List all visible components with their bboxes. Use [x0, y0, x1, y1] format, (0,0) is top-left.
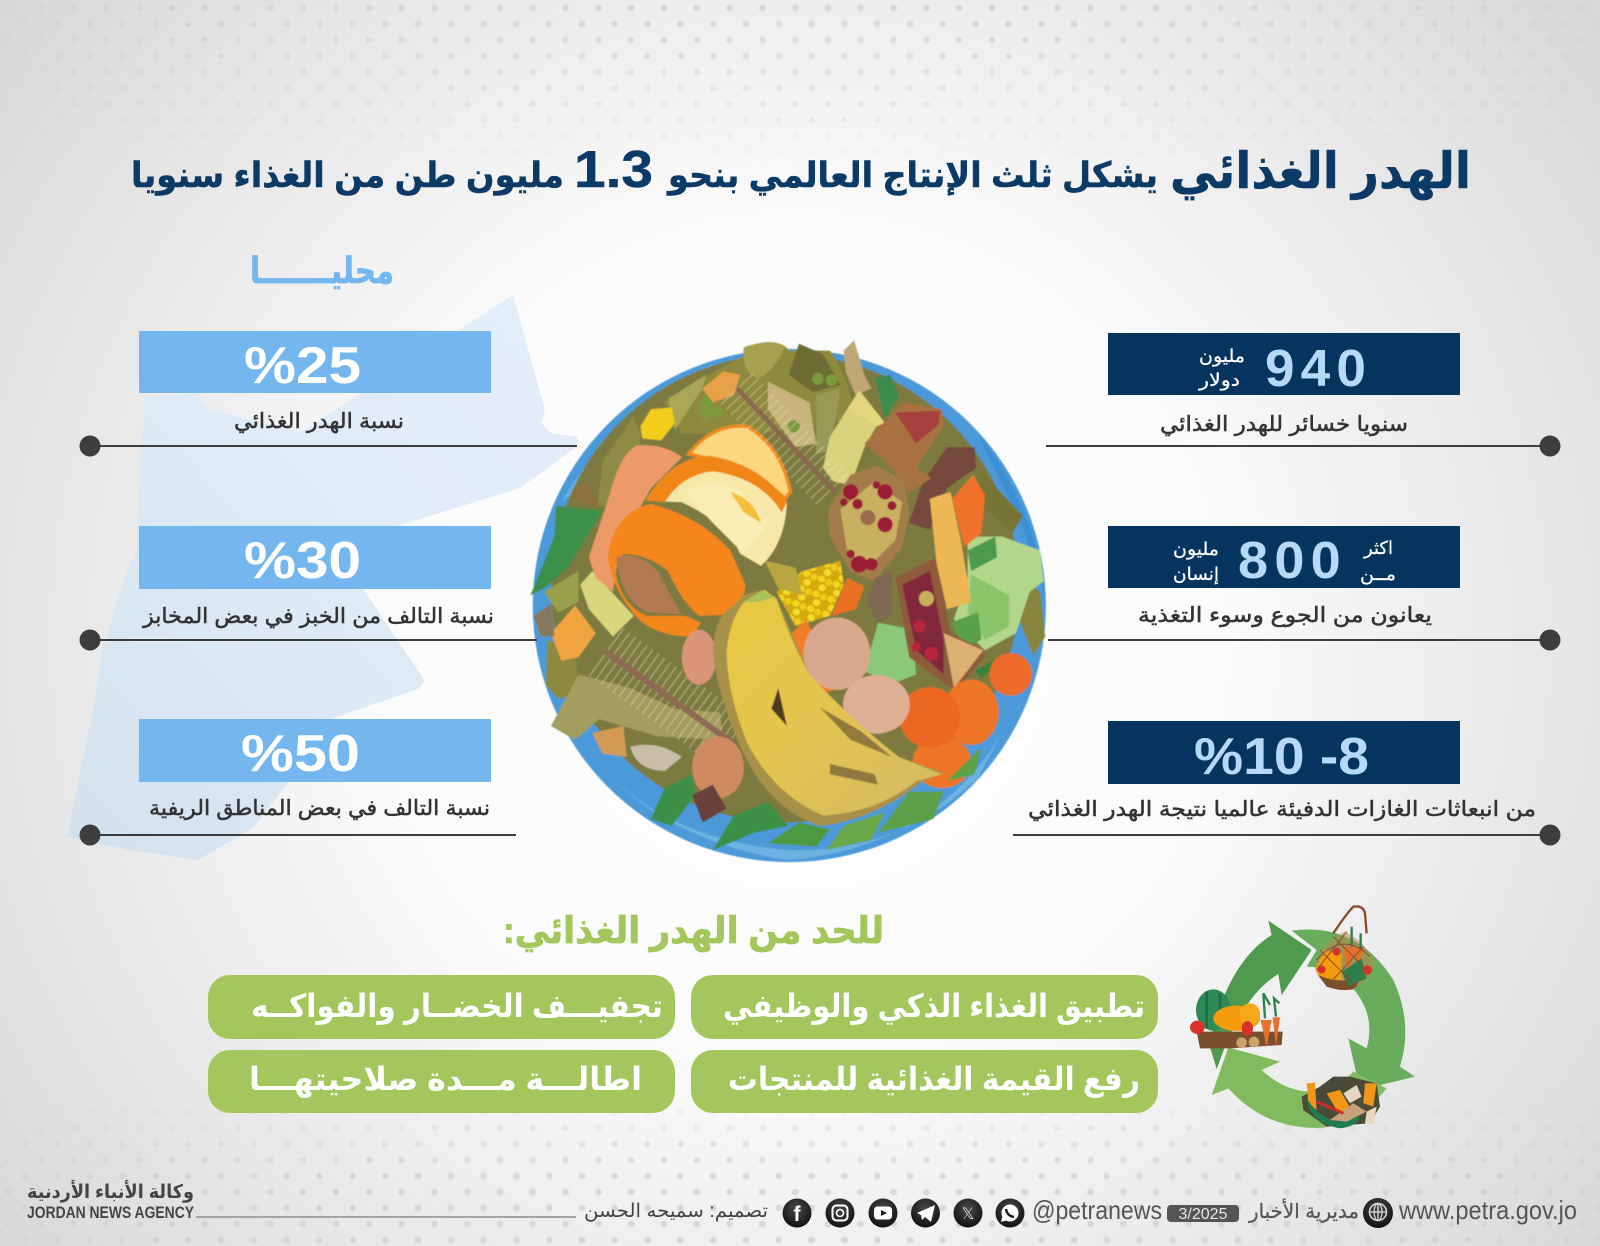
- footer: date badge: [1167, 1205, 1239, 1223]
- icon: globe: [1363, 1198, 1393, 1228]
- stat: 800 million people: مــن: [1360, 564, 1396, 585]
- stat: local food waste 25%: [80, 331, 577, 456]
- orange peel under eggs: [792, 619, 840, 695]
- icon: food recycling cycle: [1190, 906, 1415, 1128]
- pill: drying vegetables and fruit: تجفيـــف الخضــار والفواكــه: [251, 988, 663, 1025]
- pill: raising nutritional value: [691, 1050, 1158, 1113]
- stat: rural spoilage 50%: %50: [241, 725, 360, 783]
- footer: date badge: 3/2025: [1179, 1206, 1228, 1223]
- footer: website: www.petra.gov.jo: [1398, 1195, 1577, 1225]
- eggs: [682, 618, 910, 798]
- pill: smart food application: تطبيق الغذاء الذكي والوظيفي: [723, 988, 1145, 1025]
- stat: rural spoilage 50%: [80, 719, 516, 846]
- meat: [909, 447, 976, 530]
- footer: designer credit: تصميم: سميحه الحسن: [584, 1201, 768, 1222]
- dry leaf: [551, 674, 723, 740]
- net bag: [1315, 906, 1374, 990]
- stat: bread spoilage 30%: %30: [244, 532, 361, 590]
- stat: 800 million people: [1048, 526, 1560, 650]
- stat: bread spoilage 30%: [80, 526, 537, 650]
- title: الهدر الغذائي: [1170, 143, 1471, 201]
- corn and peas top: [641, 371, 838, 440]
- stat: bread spoilage 30%: نسبة التالف من الخبز في بعض المخابز: [142, 605, 494, 628]
- pill: drying vegetables and fruit: [208, 975, 675, 1039]
- pill: extending shelf life: [208, 1050, 675, 1113]
- heading: locally: محليـــــــا: [250, 250, 394, 291]
- pomegranates: [828, 402, 985, 688]
- footer: social icons: 𝕏: [962, 1206, 975, 1223]
- footer: agency logo: JORDAN NEWS AGENCY: [27, 1203, 195, 1222]
- footer: news directorate: مديرية الأخبار: [1248, 1199, 1359, 1223]
- pill: raising nutritional value: رفع القيمة الغذائية للمنتجات: [728, 1061, 1140, 1098]
- footer: social icons: [782, 1198, 1024, 1228]
- stat: rural spoilage 50%: نسبة التالف في بعض المناطق الريفية: [149, 797, 490, 820]
- title: يشكل ثلث الإنتاج العالمي بنحو: [666, 156, 1158, 196]
- footer: handle: @petranews: [1032, 1195, 1162, 1225]
- left potato and scraps: [534, 571, 682, 771]
- title: [131, 141, 1471, 201]
- stat: 940 million dollars: سنويا خسائر للهدر الغذائي: [1160, 413, 1408, 436]
- stat: local food waste 25%: %25: [244, 337, 361, 395]
- olive skins top and left: [544, 340, 1045, 699]
- stat: 800 million people: اكثر: [1363, 538, 1393, 559]
- stat: 800 million people: إنسان: [1173, 564, 1219, 584]
- vegetables: [1190, 989, 1283, 1048]
- blue bin liner: [533, 349, 1046, 862]
- fish bones: [606, 389, 835, 745]
- bottom green leaves: [651, 747, 981, 850]
- arrow: light green: [1212, 1047, 1387, 1128]
- footer: agency logo: [27, 1180, 195, 1222]
- salmon peel: [589, 445, 682, 592]
- footer: social icons: f: [794, 1203, 802, 1226]
- stat: 800 million people: يعانون من الجوع وسوء التغذية: [1138, 604, 1432, 627]
- corn: [777, 561, 844, 626]
- footer: agency logo: وكالة الأنباء الأردنية: [27, 1180, 194, 1203]
- stat: 8-10% of emissions: [1013, 721, 1560, 846]
- lettuce and green leaves: [530, 506, 1043, 681]
- banana peel: [713, 590, 944, 826]
- arrow: dark green: [1209, 921, 1312, 1069]
- stat: 940 million dollars: 940: [1265, 340, 1372, 398]
- stat: 940 million dollars: [1046, 333, 1560, 456]
- stat: 8-10% of emissions: من انبعاثات الغازات الدفيئة عالميا نتيجة الهدر الغذائي: [1028, 798, 1536, 821]
- food base: [551, 354, 1019, 822]
- stat: 8-10% of emissions: %10 -8: [1194, 728, 1369, 786]
- stat: 800 million people: مليون: [1173, 539, 1219, 560]
- food waste plate: [530, 340, 1046, 862]
- food scraps: [1302, 1077, 1380, 1128]
- title: 1.3: [574, 141, 653, 199]
- arrow: mid green: [1292, 929, 1415, 1090]
- title: مليون طن من الغذاء سنويا: [131, 156, 564, 196]
- stat: local food waste 25%: نسبة الهدر الغذائي: [234, 410, 404, 433]
- pill: smart food application: [691, 975, 1158, 1039]
- stat: 800 million people: 800: [1238, 532, 1347, 590]
- stat: 940 million dollars: دولار: [1198, 370, 1240, 391]
- spiral orange peel: [608, 426, 790, 637]
- tangerines: [900, 475, 1032, 788]
- map of Jordan: [67, 295, 578, 860]
- heading: reducing food waste: للحد من الهدر الغذائي:: [503, 910, 884, 952]
- pill: extending shelf life: اطالـــة مـــدة صلاحيتهـــا: [249, 1061, 642, 1098]
- pear: [823, 409, 876, 485]
- stat: 940 million dollars: مليون: [1199, 346, 1245, 367]
